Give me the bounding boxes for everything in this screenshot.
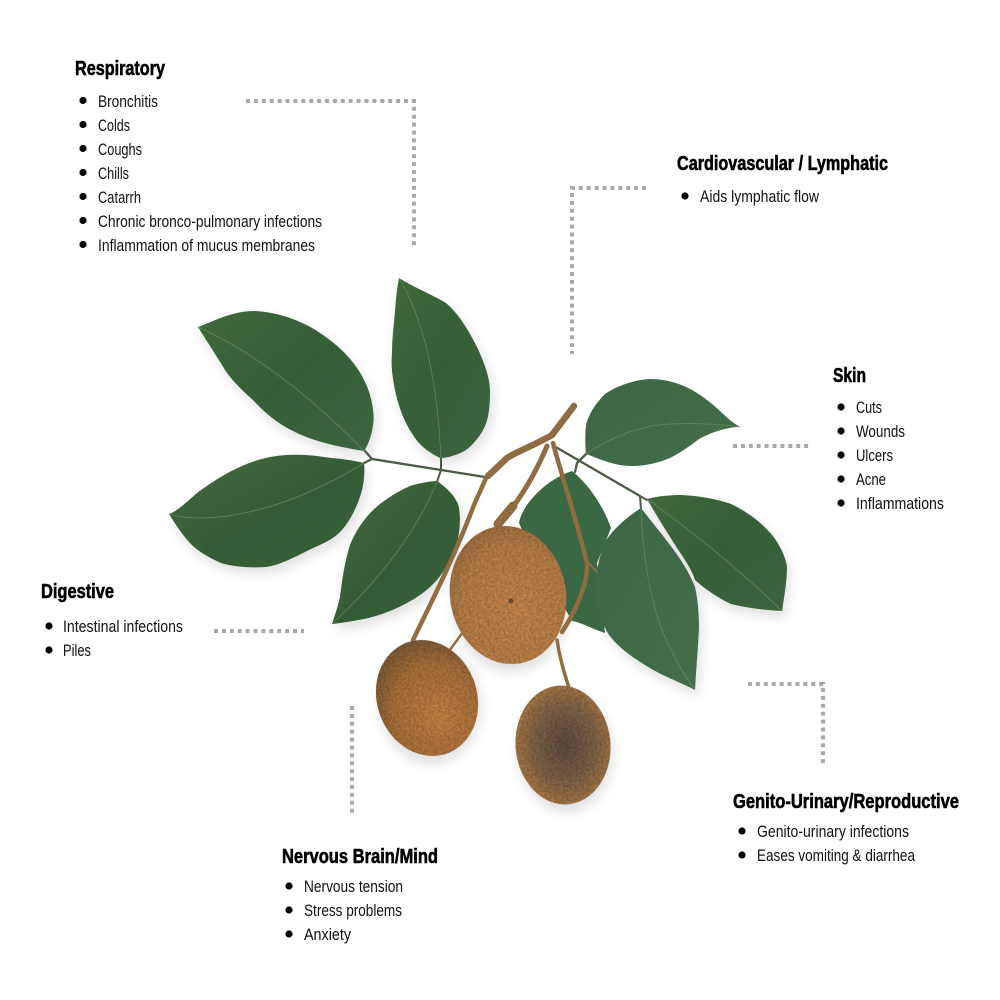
list: digestive conditions bbox=[45, 618, 183, 660]
list: cardiovascular conditions: Aids lymphatic flow bbox=[700, 188, 819, 206]
heading: respiratory: Respiratory bbox=[75, 58, 166, 80]
leaf: left bbox=[169, 455, 364, 567]
soft shadows bbox=[172, 284, 790, 812]
panel: nervous brain/mind bbox=[282, 846, 438, 944]
list: digestive conditions: Intestinal infections bbox=[63, 618, 183, 636]
panel: digestive bbox=[41, 581, 183, 660]
heading: nervous brain/mind: Nervous Brain/Mind bbox=[282, 846, 438, 868]
list: skin conditions bbox=[837, 399, 944, 513]
list: respiratory conditions: Coughs bbox=[98, 141, 142, 159]
list: skin conditions: Ulcers bbox=[856, 447, 893, 465]
fruit: large centre bbox=[439, 516, 577, 674]
list: respiratory conditions: Bronchitis bbox=[98, 93, 158, 111]
petioles bbox=[364, 446, 647, 510]
list: genito-urinary conditions: Genito-urinary infections bbox=[757, 823, 909, 841]
panel: genito-urinary/reproductive bbox=[733, 791, 959, 865]
fruit: lower left bbox=[360, 625, 494, 771]
list: genito-urinary conditions: Eases vomiting & diarrhea bbox=[757, 847, 916, 865]
list: nervous conditions: Anxiety bbox=[304, 926, 352, 944]
heading: digestive: Digestive bbox=[41, 581, 114, 603]
connector: cardiovascular bbox=[572, 188, 646, 354]
list: nervous conditions bbox=[285, 878, 403, 944]
list: respiratory conditions: Catarrh bbox=[98, 189, 141, 207]
fruit: lower right bbox=[510, 682, 616, 808]
illustration: branch with leaves and fruits bbox=[169, 278, 790, 812]
leaf: top right bbox=[585, 379, 740, 466]
list: respiratory conditions bbox=[79, 93, 322, 255]
panel: respiratory bbox=[75, 58, 322, 255]
panel: cardiovascular / lymphatic bbox=[677, 153, 888, 206]
list: skin conditions: Wounds bbox=[856, 423, 905, 441]
panel: skin bbox=[833, 365, 944, 513]
connector: respiratory bbox=[246, 101, 414, 248]
heading: cardiovascular / lymphatic: Cardiovascular / Lymphatic bbox=[677, 153, 888, 175]
leaf: lower right bbox=[596, 508, 699, 690]
list: skin conditions: Inflammations bbox=[856, 495, 944, 513]
leaf: far right bbox=[647, 495, 787, 611]
connector: skin bbox=[733, 444, 810, 448]
list: respiratory conditions: Chills bbox=[98, 165, 129, 183]
list: genito-urinary conditions bbox=[738, 823, 916, 865]
list: respiratory conditions: Inflammation of mucus membranes bbox=[98, 237, 315, 255]
leaf: top center bbox=[392, 278, 490, 458]
list: respiratory conditions: Chronic bronco-pulmonary infections bbox=[98, 213, 322, 231]
list: respiratory conditions: Colds bbox=[98, 117, 130, 135]
leaf: top left bbox=[198, 311, 374, 451]
stems bbox=[413, 406, 597, 688]
list: nervous conditions: Stress problems bbox=[304, 902, 402, 920]
connector: nervous bbox=[350, 706, 354, 815]
connector: digestive bbox=[214, 629, 304, 633]
connector: genito-urinary bbox=[748, 684, 823, 766]
list: nervous conditions: Nervous tension bbox=[304, 878, 403, 896]
list: digestive conditions: Piles bbox=[63, 642, 91, 660]
heading: skin: Skin bbox=[833, 365, 866, 387]
list: skin conditions: Acne bbox=[856, 471, 886, 489]
leaf: behind fruit bbox=[519, 471, 611, 633]
list: skin conditions: Cuts bbox=[856, 399, 882, 417]
leaf: lower center bbox=[332, 481, 460, 624]
heading: genito-urinary/reproductive: Genito-Urinary/Reproductive bbox=[733, 791, 959, 813]
